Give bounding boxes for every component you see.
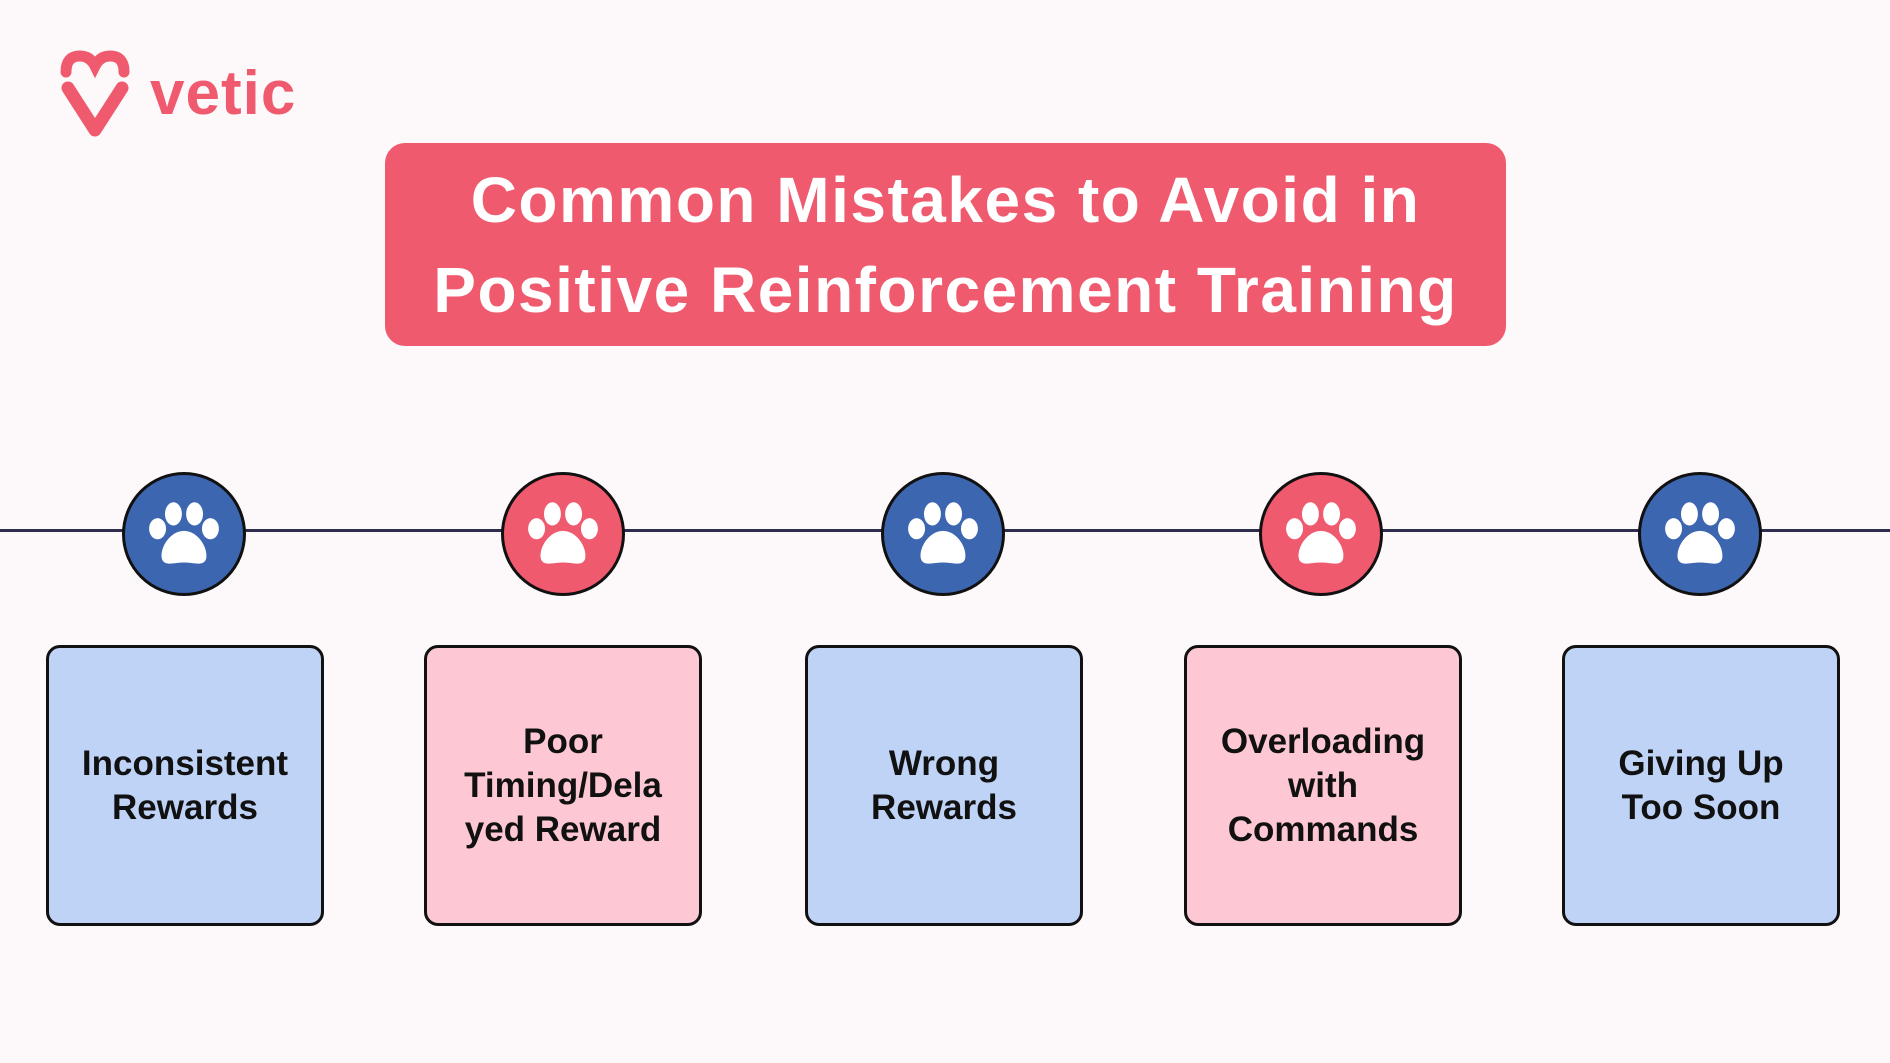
- icon: paw 4: [1259, 472, 1383, 596]
- card: giving up: [1562, 645, 1840, 926]
- card: inconsistent rewards: Rewards: [112, 788, 258, 826]
- title: [385, 143, 1506, 346]
- card: giving up: Too Soon: [1622, 788, 1780, 826]
- card: overloading: with: [1288, 766, 1358, 804]
- icon: paw 3: [881, 472, 1005, 596]
- icon: paw 2: [501, 472, 625, 596]
- card: wrong rewards: [805, 645, 1083, 926]
- card: wrong rewards: Rewards: [871, 788, 1017, 826]
- card: poor timing: Poor: [523, 722, 603, 760]
- logo: [60, 50, 296, 136]
- icon: paw 5: [1638, 472, 1762, 596]
- icon: paw 1: [122, 472, 246, 596]
- card: poor timing: [424, 645, 702, 926]
- card: overloading: Commands: [1228, 810, 1418, 848]
- title: Positive Reinforcement Training: [433, 254, 1458, 326]
- card: wrong rewards: Wrong: [889, 744, 999, 782]
- card: overloading: Overloading: [1221, 722, 1425, 760]
- icon: heart-v: [60, 50, 130, 136]
- card: inconsistent rewards: [46, 645, 324, 926]
- brand name: vetic: [150, 59, 296, 128]
- card: giving up: Giving Up: [1618, 744, 1784, 782]
- card: poor timing: yed Reward: [465, 810, 661, 848]
- title: Common Mistakes to Avoid in: [471, 164, 1420, 236]
- card: inconsistent rewards: Inconsistent: [82, 744, 288, 782]
- card: overloading: [1184, 645, 1462, 926]
- card: poor timing: Timing/Dela: [464, 766, 662, 804]
